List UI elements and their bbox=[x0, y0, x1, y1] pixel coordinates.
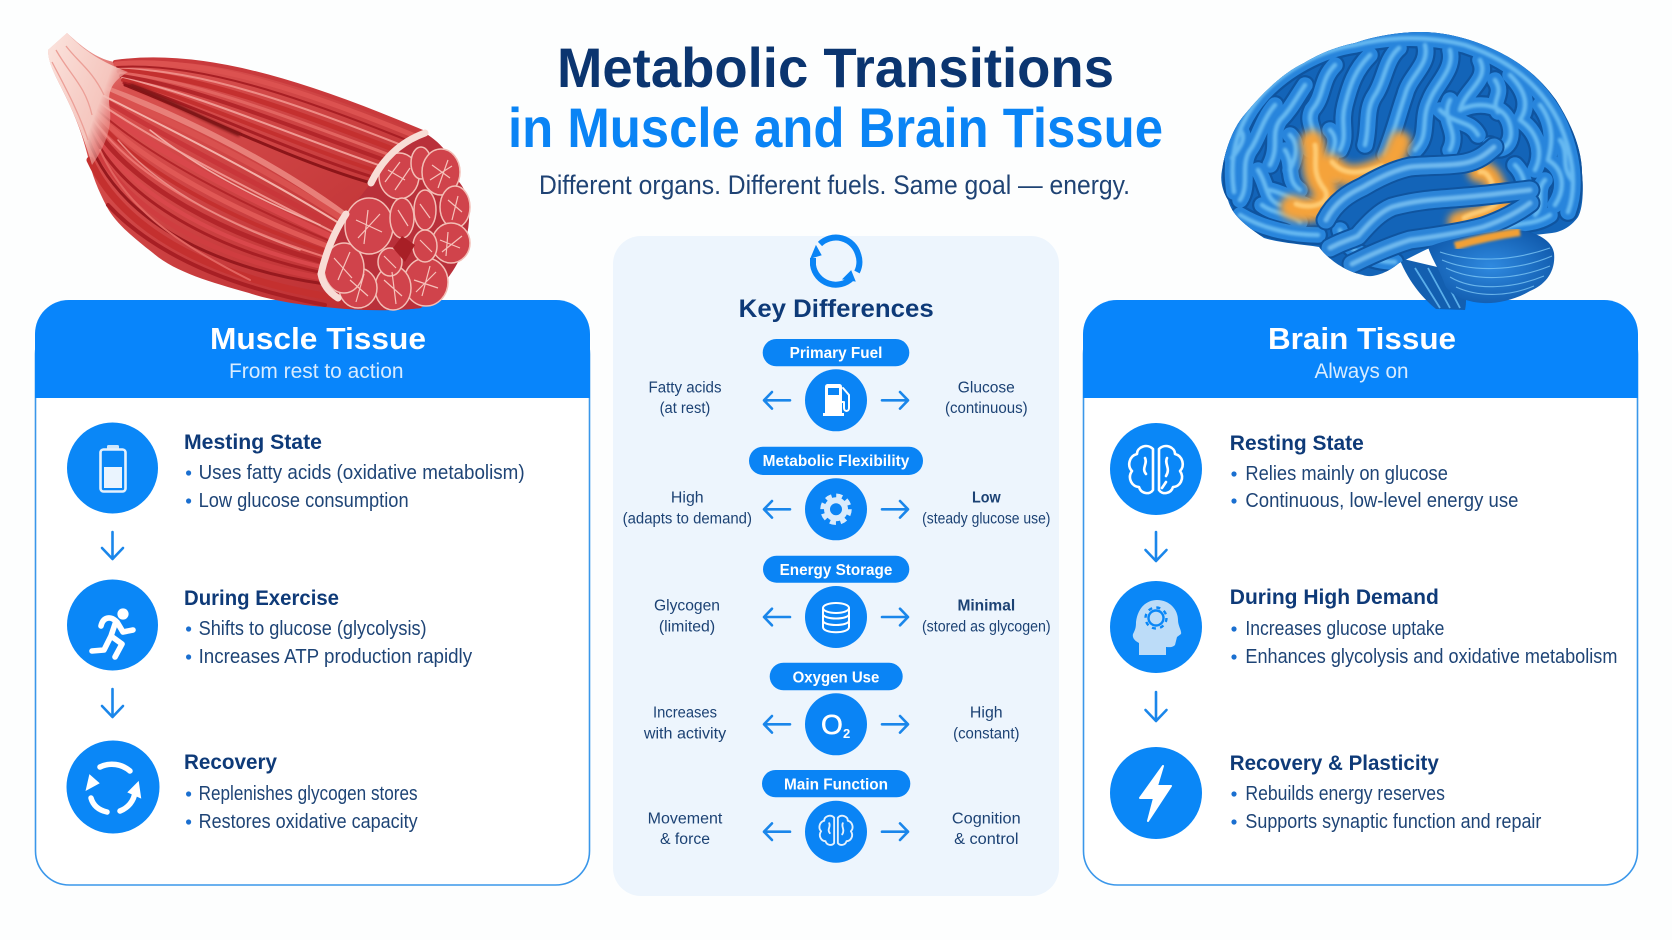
step: recovery: Recovery bbox=[184, 751, 277, 774]
step: resting state: Resting State bbox=[1230, 432, 1364, 455]
icon: cycle arrows bbox=[811, 238, 859, 285]
panel header bbox=[1083, 300, 1638, 398]
row: metabolic flexibility: (adapts to demand) bbox=[623, 510, 752, 527]
row: primary fuel: Fatty acids bbox=[648, 379, 722, 396]
step: recovery: Replenishes glycogen stores bbox=[199, 783, 418, 805]
step: during high demand: Enhances glycolysis and oxidative metabolism bbox=[1245, 646, 1617, 668]
row: oxygen use bbox=[643, 663, 1019, 755]
icon: fuel pump bbox=[823, 384, 849, 416]
panel: brain tissue bbox=[1083, 300, 1638, 885]
step: resting state: Low glucose consumption bbox=[199, 490, 409, 512]
row: oxygen use: (constant) bbox=[953, 725, 1019, 742]
step: resting state: Uses fatty acids (oxidative metabolism) bbox=[199, 462, 525, 484]
row: main function: Main Function bbox=[784, 776, 888, 793]
row: metabolic flexibility: Low bbox=[972, 489, 1002, 506]
step: recovery bbox=[66, 740, 418, 834]
step: resting state: Continuous, low-level energy use bbox=[1245, 490, 1518, 512]
heading: brain tissue: Brain Tissue bbox=[1268, 321, 1456, 356]
muscle body bbox=[48, 33, 440, 310]
row: primary fuel bbox=[648, 339, 1028, 431]
step: during high demand: During High Demand bbox=[1230, 586, 1439, 609]
icon: database bbox=[823, 603, 849, 632]
step: recovery and plasticity: Recovery & Plasticity bbox=[1230, 752, 1439, 775]
step: recovery: Restores oxidative capacity bbox=[199, 811, 418, 833]
step: recovery and plasticity bbox=[1110, 747, 1542, 839]
row: energy storage: Energy Storage bbox=[780, 562, 892, 579]
cortex base bbox=[1221, 32, 1583, 276]
temporal gyri bbox=[1326, 147, 1530, 264]
step: during high demand: Increases glucose uptake bbox=[1245, 618, 1444, 640]
orange active regions bbox=[1292, 142, 1502, 222]
row: energy storage: (stored as glycogen) bbox=[922, 619, 1051, 636]
subheading: Always on bbox=[1314, 360, 1408, 383]
row: energy storage: Minimal bbox=[957, 598, 1015, 615]
heading: muscle tissue: Muscle Tissue bbox=[210, 321, 426, 356]
step: resting state: Mesting State bbox=[184, 431, 322, 454]
row: main function: Movement bbox=[648, 810, 723, 827]
subheading: From rest to action bbox=[229, 360, 404, 383]
panel body bbox=[36, 320, 590, 885]
step: during exercise: Increases ATP production rapidly bbox=[199, 646, 472, 668]
step: resting state bbox=[67, 422, 525, 514]
row: primary fuel: (continuous) bbox=[945, 400, 1028, 417]
row: metabolic flexibility: Metabolic Flexibility bbox=[763, 453, 909, 470]
row: main function: Cognition bbox=[952, 810, 1021, 827]
step: resting state: Relies mainly on glucose bbox=[1245, 463, 1448, 485]
row: oxygen use: with activity bbox=[643, 725, 726, 742]
upper bundle fibres bbox=[115, 59, 425, 183]
icon: gear bbox=[822, 496, 850, 523]
lower bundle fibres bbox=[85, 85, 345, 305]
step: resting state bbox=[1110, 423, 1518, 515]
panel header bbox=[35, 300, 590, 398]
row: metabolic flexibility: High bbox=[671, 489, 704, 506]
icon: O2: O bbox=[821, 709, 843, 740]
step: during high demand bbox=[1110, 581, 1617, 673]
step: recovery and plasticity: Supports synaptic function and repair bbox=[1245, 811, 1542, 833]
icon: O2: 2 bbox=[843, 726, 850, 741]
icon: lightning bolt bbox=[1140, 766, 1171, 821]
panel body bbox=[1084, 320, 1638, 885]
title bbox=[508, 36, 1163, 159]
row: energy storage: (limited) bbox=[659, 619, 715, 636]
gyri bbox=[1232, 38, 1573, 264]
step: during exercise bbox=[67, 580, 472, 670]
fibre-end rims bbox=[371, 133, 425, 183]
arrow: exercise to recovery bbox=[102, 689, 123, 717]
icon: brain bbox=[819, 816, 853, 845]
icon: battery bbox=[100, 445, 126, 492]
arrow: rest to exercise bbox=[102, 532, 123, 559]
row: main function: & control bbox=[954, 831, 1018, 848]
icon: runner bbox=[92, 608, 133, 657]
row: primary fuel: (at rest) bbox=[660, 400, 710, 417]
arrow: high demand to plasticity bbox=[1146, 692, 1166, 721]
row: energy storage bbox=[654, 556, 1051, 648]
row: metabolic flexibility: (steady glucose use) bbox=[922, 510, 1050, 527]
panel: muscle tissue bbox=[35, 300, 590, 885]
row: energy storage: Glycogen bbox=[654, 598, 720, 615]
brainstem bbox=[1399, 258, 1466, 310]
title: in Muscle and Brain Tissue bbox=[508, 96, 1163, 159]
illustration: muscle bbox=[48, 33, 470, 310]
icon: head with gear bbox=[1133, 600, 1181, 655]
step: during exercise: Shifts to glucose (glycolysis) bbox=[199, 618, 427, 640]
row: oxygen use: Oxygen Use bbox=[793, 669, 879, 686]
subtitle: Different organs. Different fuels. Same goal — energy. bbox=[539, 170, 1130, 200]
tendon bbox=[48, 33, 128, 165]
cross-section bbox=[320, 133, 470, 310]
step: recovery and plasticity: Rebuilds energy reserves bbox=[1245, 783, 1445, 805]
cerebellum bbox=[1428, 230, 1554, 303]
arrow: rest to high demand bbox=[1146, 532, 1166, 561]
row: main function: & force bbox=[660, 831, 710, 848]
row: oxygen use: Increases bbox=[653, 704, 717, 721]
row: main function bbox=[648, 770, 1021, 863]
panel: key differences bbox=[613, 236, 1059, 896]
step: during exercise: During Exercise bbox=[184, 587, 339, 610]
row: primary fuel: Glucose bbox=[958, 379, 1015, 396]
row: oxygen use: High bbox=[970, 704, 1003, 721]
row: primary fuel: Primary Fuel bbox=[790, 345, 882, 362]
icon: brain outline bbox=[1129, 446, 1183, 493]
illustration: brain bbox=[1221, 32, 1583, 310]
row: metabolic flexibility bbox=[623, 447, 1050, 540]
icon: recovery cycle bbox=[87, 764, 140, 812]
heading: key differences: Key Differences bbox=[739, 295, 934, 323]
gap between bundles bbox=[130, 85, 240, 135]
title: Metabolic Transitions bbox=[557, 36, 1114, 99]
